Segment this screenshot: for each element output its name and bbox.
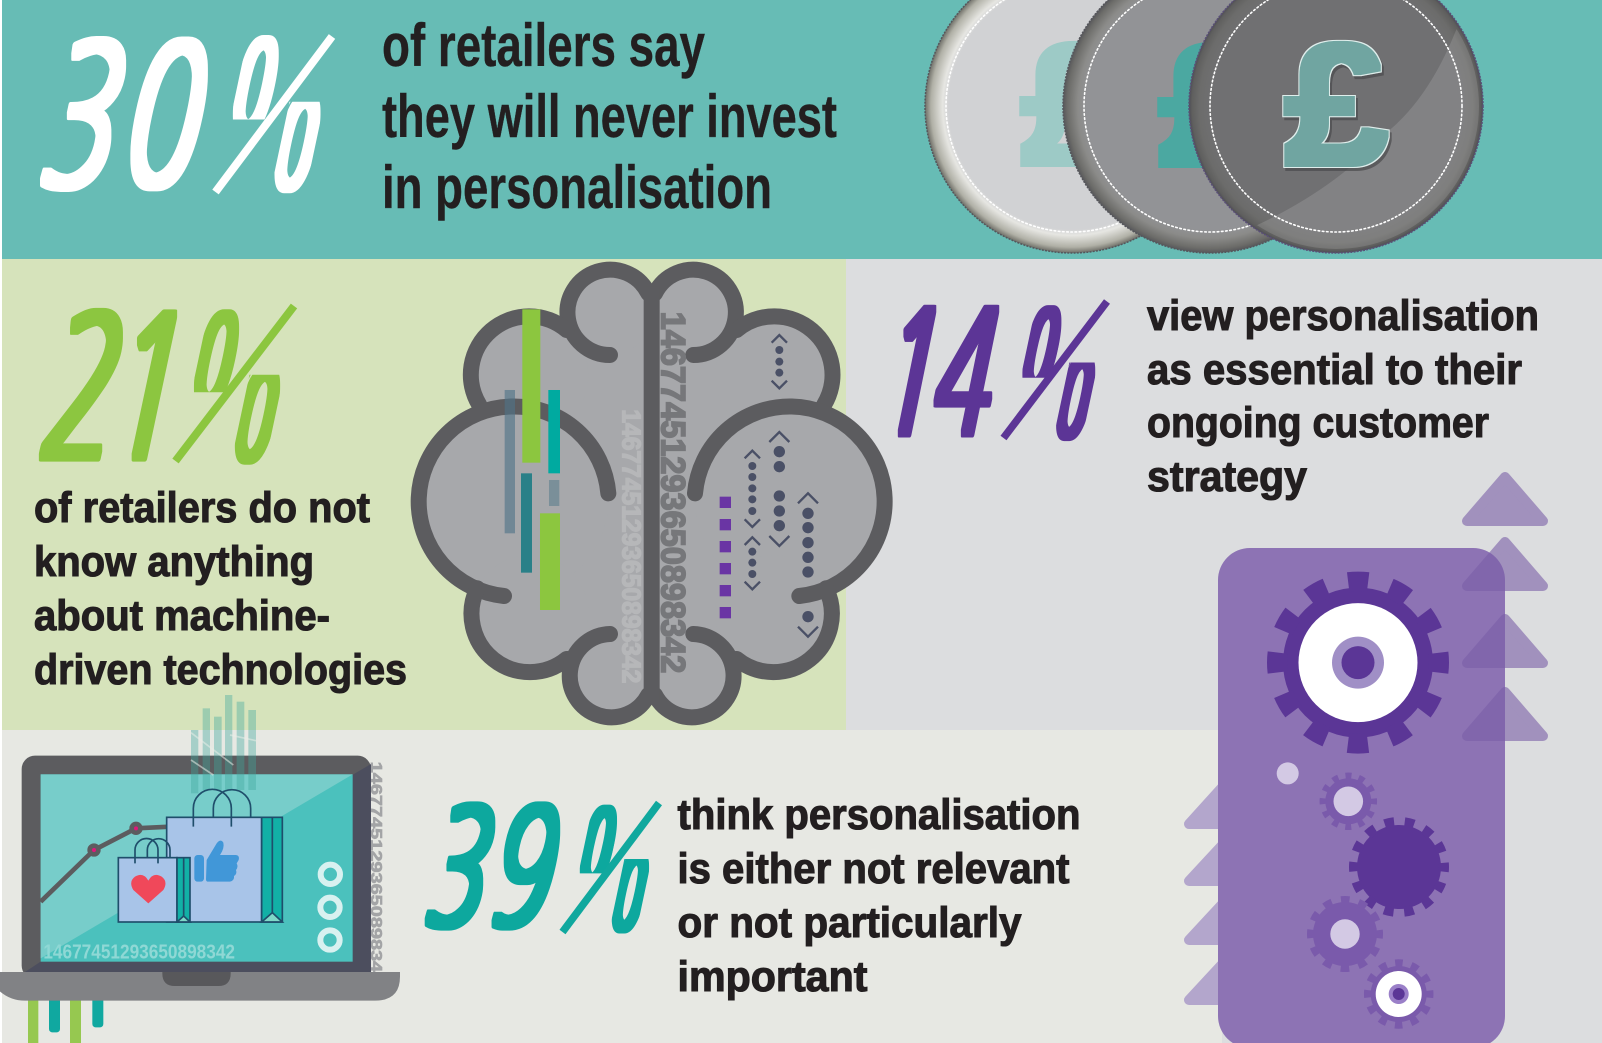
laptop bezel [22, 756, 371, 979]
brain number strip light: 14677451293650898342 [616, 409, 646, 683]
icon: three screen rings [320, 865, 340, 950]
icon: small shopping bag with heart [118, 838, 190, 922]
text: 14% description: ongoing customer [1147, 399, 1489, 447]
panel: purple gear card [1218, 548, 1505, 1043]
text: 39% description: think personalisation [678, 791, 1080, 839]
text: 30% description: they will never invest [382, 83, 837, 150]
icon: medium gear [1311, 900, 1379, 968]
illustration: three pound coins [925, 0, 1500, 270]
panel: top teal band [2, 0, 1602, 259]
text: 21% description: know anything [34, 538, 314, 586]
screen number strip: 14677451293650898342 [43, 942, 235, 964]
stat: 14% [898, 299, 1110, 442]
icon: light coin: £ [1020, 8, 1124, 201]
text: 14% description [1147, 292, 1539, 501]
stat: 14%: % [997, 267, 1120, 479]
stat: 39%: % [556, 770, 672, 970]
icon: mid grey coin [1063, 0, 1357, 253]
stat: 30% [40, 34, 336, 194]
panel: light bottom section [2, 730, 1222, 1043]
text: 39% description: or not particularly [678, 899, 1022, 947]
stat: 39% [424, 800, 662, 934]
text: 14% description: view personalisation [1147, 292, 1539, 340]
stat: 14%: 14 [868, 290, 1013, 460]
brain number strip dark: 14677451293650898342 [653, 312, 691, 673]
icon: large gear [1277, 582, 1439, 744]
text: 21% description [34, 484, 407, 694]
stat: 30%: 30 [28, 18, 226, 215]
icon: bottom gear with eye [1368, 963, 1430, 1025]
illustration: right arrows over card [1467, 477, 1543, 736]
text: 30% description: in personalisation [382, 154, 772, 221]
stat: 21%: 21 [28, 290, 208, 486]
text: 30% description [382, 12, 837, 221]
icon: solid dark gear [1354, 822, 1444, 912]
vertical number strip: 14677451293650898342 [367, 762, 384, 983]
brain data bars [505, 309, 560, 610]
icon: dark coin: £ [1284, 8, 1388, 201]
stat: 21%: % [165, 264, 310, 508]
brain left hemisphere [418, 270, 652, 717]
text: 21% description: of retailers do not [34, 484, 370, 532]
stat: 21% [38, 304, 298, 465]
text: 39% description: is either not relevant [678, 845, 1070, 893]
brain purple squares [720, 497, 731, 618]
laptop screen [41, 774, 353, 962]
brain centre divider [644, 287, 660, 702]
illustration: laptop with shopping bags [0, 695, 400, 1043]
icon: large shopping bag with thumbs up [167, 789, 282, 922]
icon: small gear [1323, 776, 1374, 827]
text: 14% description: as essential to their [1147, 346, 1522, 394]
rising data stripes [191, 695, 256, 793]
brain right hemisphere [652, 270, 885, 717]
brain dot sequences [745, 335, 818, 637]
text: 14% description: strategy [1147, 453, 1307, 501]
panel: grey right section [846, 259, 1602, 1043]
icon: dark coin [1188, 0, 1484, 254]
icon: light coin [925, 0, 1219, 253]
text: 39% description [678, 791, 1080, 1001]
icon: mid grey coin: £ [1158, 9, 1262, 202]
text: 21% description: about machine- [34, 592, 330, 640]
illustration: brain [418, 270, 885, 717]
illustration: left arrows behind card [1189, 782, 1265, 1000]
panel: green left section [2, 259, 846, 730]
stripe crossings [191, 733, 256, 775]
text: 21% description: driven technologies [34, 646, 407, 694]
icon: small dot [1277, 762, 1299, 784]
chart line with nodes [41, 822, 170, 902]
laptop base [0, 972, 400, 1001]
text: 39% description: important [678, 953, 868, 1001]
laptop feet bars [28, 997, 103, 1043]
text: 30% description: of retailers say [382, 12, 705, 79]
stat: 39%: 39 [416, 788, 574, 950]
